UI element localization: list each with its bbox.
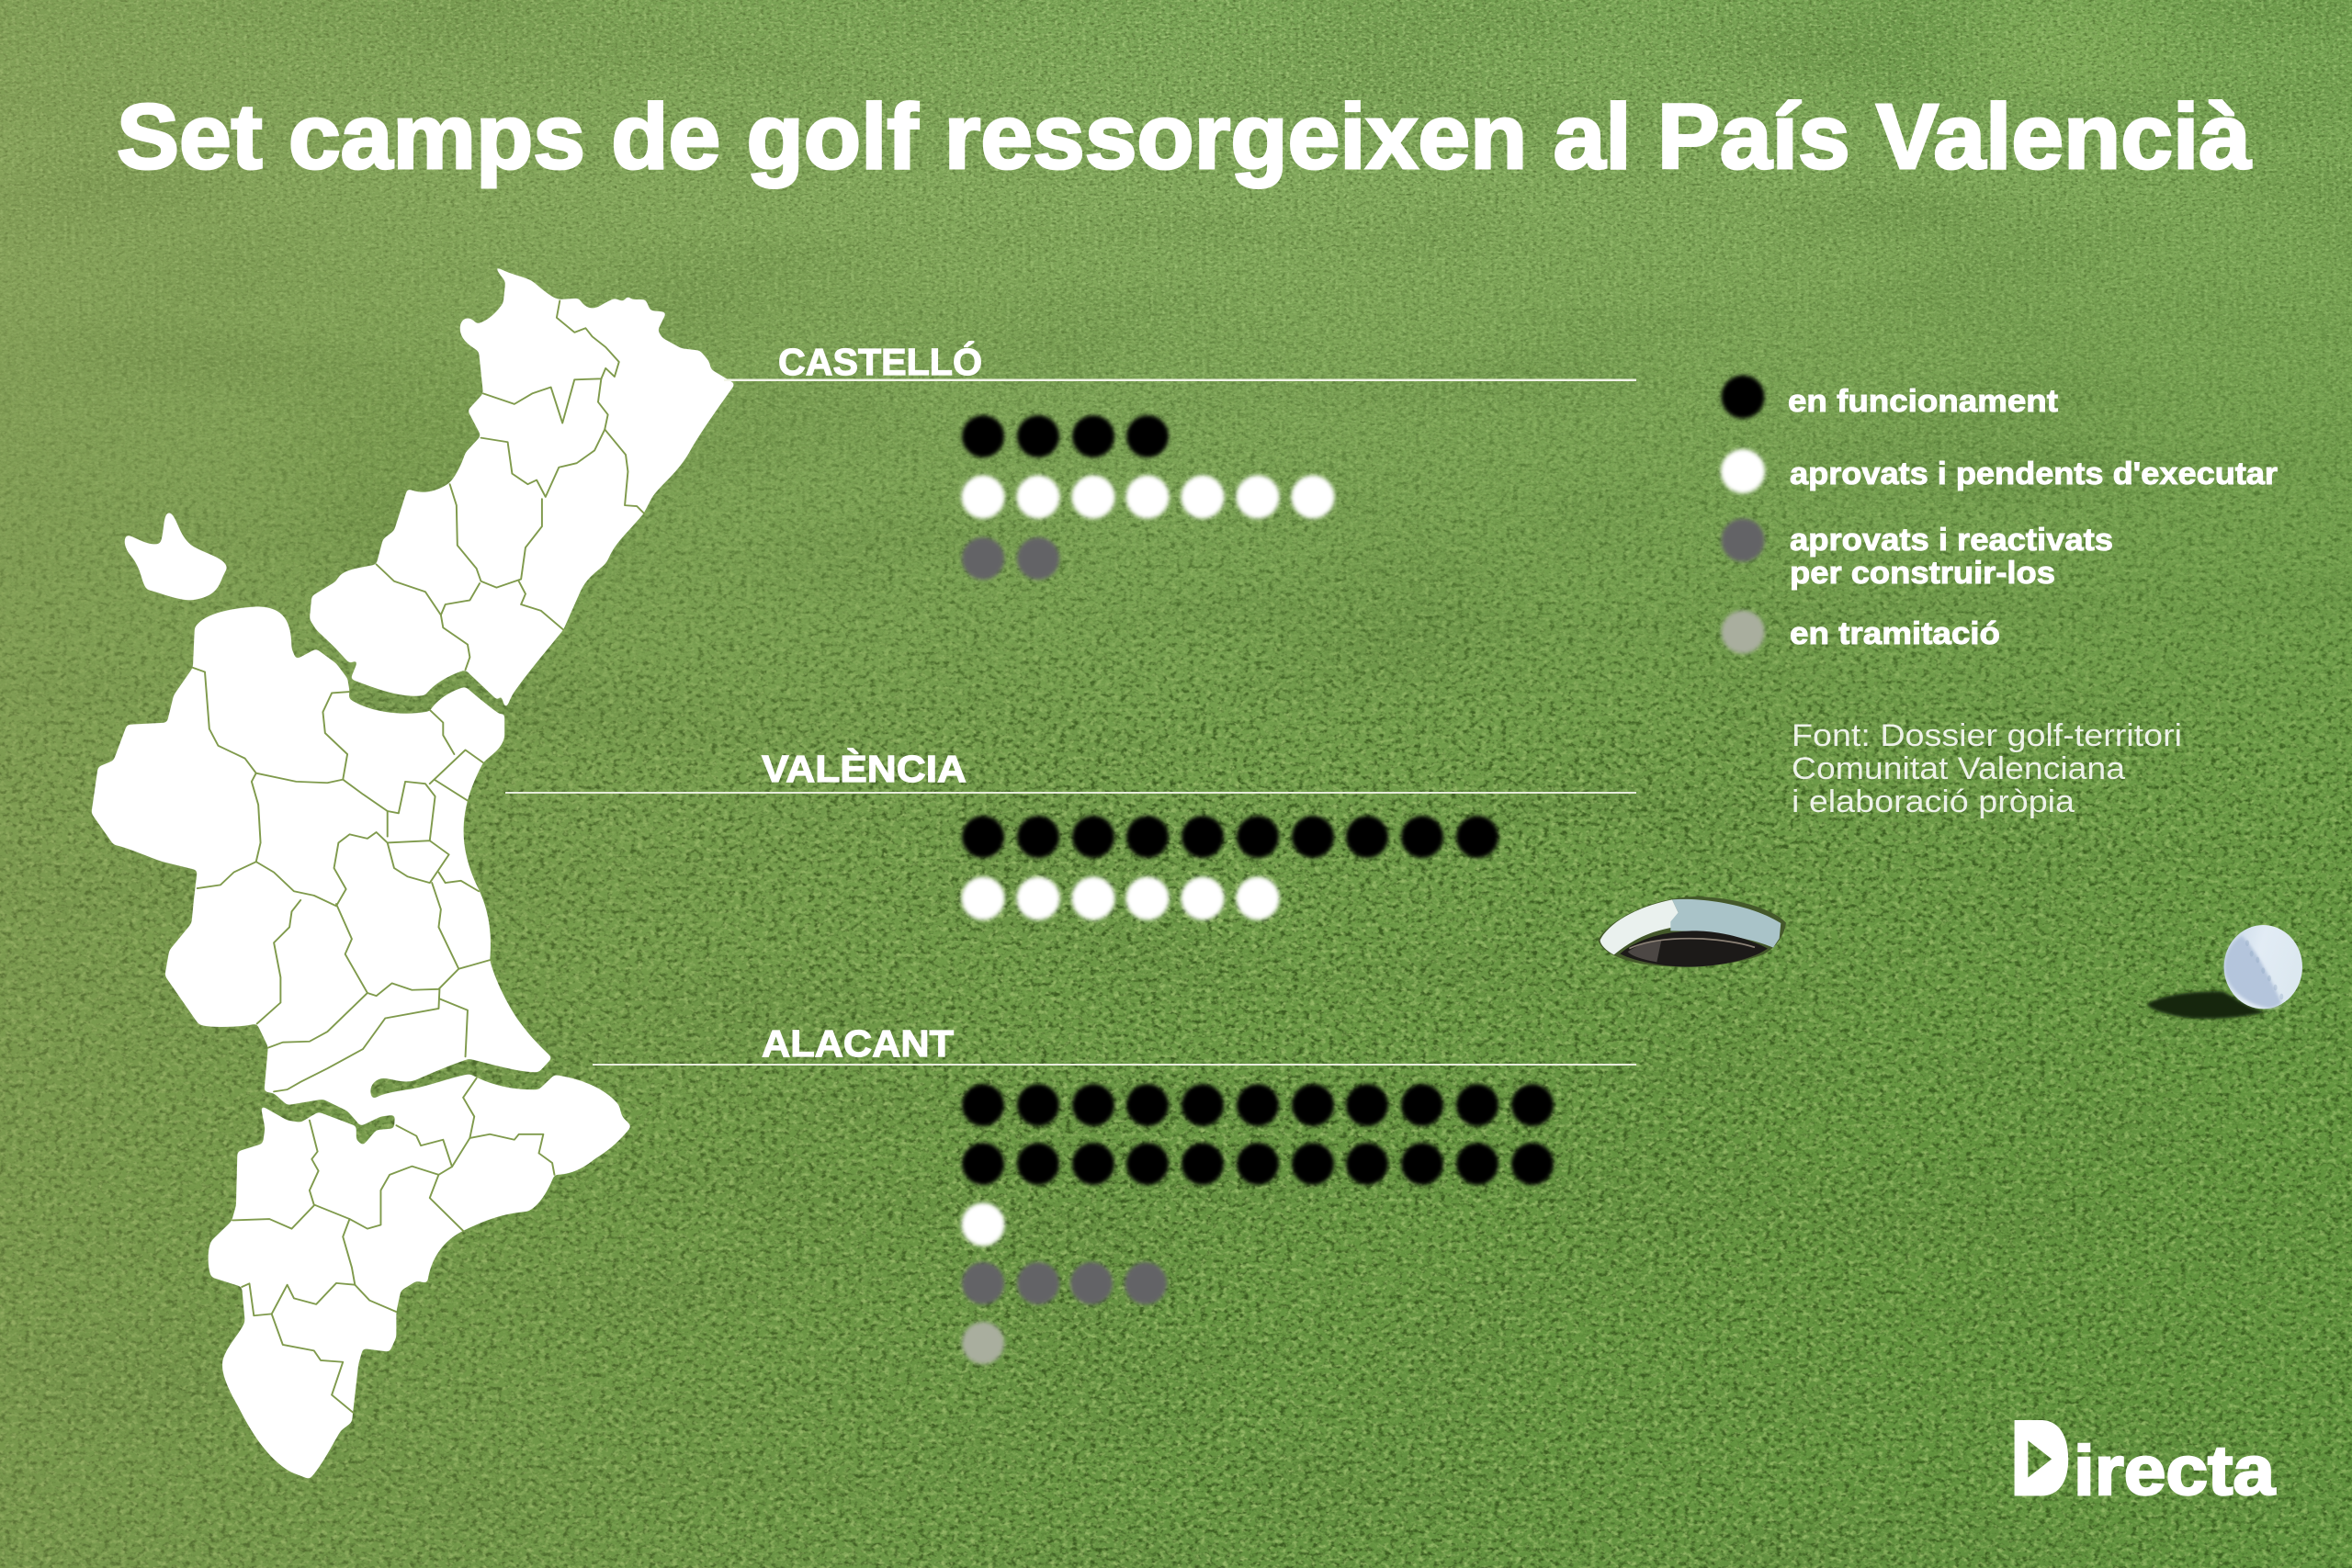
legend dot: approved pending	[1721, 449, 1765, 493]
dots: València approved pending (6)	[961, 876, 1279, 920]
legend label: reactivated	[1790, 523, 2113, 591]
ball shadow	[2147, 991, 2267, 1019]
heading: Alacant: ALACANT	[762, 1022, 954, 1065]
legend label: reactivated: aprovats i reactivats	[1790, 523, 2113, 558]
dots: Alacant in operation, row 2 (11)	[962, 1143, 1554, 1185]
map: Ademuz enclave	[125, 512, 227, 600]
source note	[1792, 718, 2182, 819]
legend label: in operation: en funcionament	[1788, 384, 2058, 419]
dots: Alacant approved pending (1)	[961, 1203, 1005, 1246]
rule: València	[505, 792, 1636, 794]
heading: València: VALÈNCIA	[762, 748, 967, 790]
legend label: reactivated: per construir-los	[1790, 556, 2055, 591]
heading: Castelló: CASTELLÓ	[778, 341, 982, 383]
legend dot: reactivated	[1722, 518, 1764, 562]
rule: Alacant	[593, 1064, 1636, 1066]
title: Set camps de golf ressorgeixen al País Valencià	[117, 85, 2251, 188]
map: Valencian Country with comarques	[91, 258, 735, 1479]
dots: Alacant reactivated (4)	[962, 1262, 1167, 1304]
ball	[2224, 925, 2302, 1009]
rule: Castelló	[724, 378, 1636, 381]
legend label: approved pending: aprovats i pendents d'executar	[1790, 457, 2278, 491]
legend	[1721, 375, 2278, 654]
dots: València in operation (10)	[962, 816, 1498, 858]
dots: Alacant in operation, row 1 (11)	[962, 1084, 1554, 1126]
map: València and Alacant block	[91, 606, 631, 1479]
source note: Comunitat Valenciana	[1792, 751, 2125, 786]
map: comarca borders	[193, 300, 644, 1413]
legend dot: in operation	[1722, 375, 1764, 419]
logo mark: D with play triangle	[2015, 1420, 2068, 1496]
logo wordmark: irecta	[2074, 1432, 2276, 1510]
dots: Alacant in processing (1)	[962, 1322, 1004, 1364]
illustration: golf ball and shadow	[2147, 925, 2302, 1019]
dots: Castelló reactivated (2)	[962, 537, 1059, 580]
legend label: in processing: en tramitació	[1790, 616, 2000, 651]
illustration: golf hole	[1598, 897, 1786, 967]
section: Castelló	[724, 341, 1636, 580]
source note: i elaboració pròpia	[1792, 784, 2075, 819]
dots: Castelló in operation (4)	[962, 415, 1169, 457]
section: Alacant	[593, 1022, 1636, 1364]
legend dot: in processing	[1722, 610, 1764, 654]
section: València	[505, 748, 1636, 920]
map: Castelló block	[310, 258, 735, 710]
dots: Castelló approved pending (7)	[961, 476, 1334, 518]
source note: Font: Dossier golf-territori	[1792, 718, 2182, 753]
logo: Directa	[2015, 1420, 2276, 1510]
map: white silhouette	[91, 258, 735, 1479]
